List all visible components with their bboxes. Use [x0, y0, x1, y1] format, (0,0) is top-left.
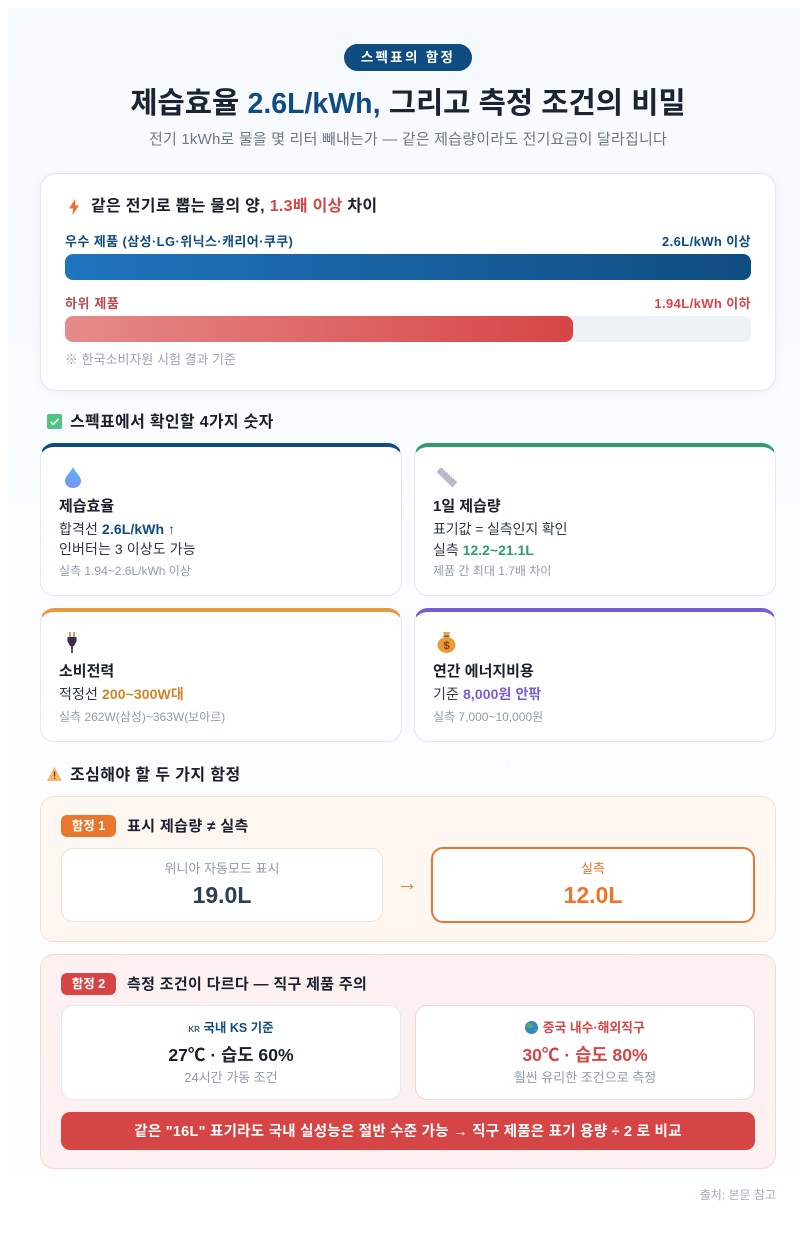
panel: trap 2 [40, 954, 776, 1169]
card note: 실측 7,000~10,000원 [433, 710, 543, 724]
header badge [344, 44, 472, 71]
trap 2 heading: 측정 조건이 다르다 — 직구 제품 주의 [127, 976, 367, 993]
card: daily capacity [414, 443, 776, 596]
icon: ruler [436, 468, 457, 488]
label: poor products: 하위 제품 [65, 296, 119, 311]
label text: 중국 내수·해외직구 [543, 1020, 645, 1035]
icon: check [47, 414, 62, 429]
section heading: two traps [47, 766, 241, 784]
callout banner: 같은 "16L" 표기라도 국내 실성능은 절반 수준 가능 → 직구 제품은 표기 용량 ÷ 2 로 비교 [134, 1124, 682, 1140]
heading text: 스펙표에서 확인할 4가지 숫자 [70, 414, 274, 431]
box: measured value [431, 847, 755, 923]
source note: 출처: 본문 참고 [700, 1188, 776, 1202]
card text: 합격선 2.6L/kWh ↑ [59, 521, 175, 537]
icon: plug [68, 632, 76, 653]
title: 제습효율 2.6L/kWh, 그리고 측정 조건의 비밀 [130, 87, 686, 120]
badge: trap 1: 함정 1 [72, 819, 105, 833]
card: power consumption [40, 608, 402, 742]
box label: 위니아 자동모드 표시 [165, 861, 279, 876]
callout banner [61, 1112, 755, 1150]
icon: money bag: $ [443, 640, 450, 652]
box label: 실측 [581, 861, 605, 876]
icon: warning [47, 767, 62, 781]
box note: 훨씬 유리한 조건으로 측정 [514, 1070, 656, 1085]
icon: water drop [65, 467, 81, 488]
bar: good products [65, 254, 751, 280]
box: China overseas standard [415, 1005, 755, 1100]
badge: trap 2 [61, 973, 116, 995]
section heading: four numbers [47, 413, 274, 431]
value: good products: 2.6L/kWh 이상 [662, 234, 751, 249]
badge: trap 1 [61, 815, 116, 837]
icon: lightning [69, 199, 79, 215]
box: Korean KS standard [61, 1005, 401, 1100]
card title: 소비전력 [59, 663, 114, 680]
bar: poor products [65, 316, 751, 342]
card text: 표기값 = 실측인지 확인 [433, 521, 567, 537]
box note: 24시간 가동 조건 [184, 1070, 278, 1085]
icon: money bag [438, 632, 456, 653]
heading text: 조심해야 할 두 가지 함정 [70, 767, 241, 784]
subtitle: 전기 1kWh로 물을 몇 리터 빼내는가 — 같은 제습량이라도 전기요금이 달라집니다 [149, 131, 667, 148]
card text: 적정선 200~300W대 [59, 686, 184, 702]
card title: 1일 제습량 [433, 498, 501, 515]
card: dehumidifying efficiency [40, 443, 402, 596]
panel: trap 1 [40, 796, 776, 942]
card: annual energy cost [414, 608, 776, 742]
bar fill [65, 316, 573, 342]
card note: 실측 262W(삼성)~363W(보아르) [59, 710, 225, 724]
box value: 27℃ · 습도 60% [168, 1045, 294, 1065]
badge: trap 2: 함정 2 [72, 977, 105, 991]
arrow: → [396, 872, 418, 895]
panel: efficiency comparison [40, 173, 776, 391]
panel heading: 같은 전기로 뽑는 물의 양, 1.3배 이상 차이 [91, 198, 377, 215]
trap 1 heading: 표시 제습량 ≠ 실측 [127, 818, 249, 835]
card note: 실측 1.94~2.6L/kWh 이상 [59, 564, 191, 578]
card title: 연간 에너지비용 [433, 663, 534, 680]
value: poor products: 1.94L/kWh 이하 [654, 296, 751, 311]
box label [525, 1020, 645, 1035]
card text: 실측 12.2~21.1L [433, 542, 534, 558]
label: good products: 우수 제품 (삼성·LG·위닉스·캐리어·쿠쿠) [65, 234, 293, 249]
box: labelled value [61, 848, 383, 922]
icon: globe [525, 1021, 538, 1034]
box value: 30℃ · 습도 80% [522, 1045, 648, 1065]
footnote: ※ 한국소비자원 시험 결과 기준 [65, 352, 236, 367]
box value: 12.0L [564, 882, 622, 908]
card title: 제습효율 [59, 498, 114, 515]
card note: 제품 간 최대 1.7배 차이 [433, 564, 551, 578]
box label: KR 국내 KS 기준 [188, 1021, 274, 1035]
card text: 기준 8,000원 안팎 [433, 686, 541, 702]
box value: 19.0L [193, 882, 251, 908]
header badge: 스펙표의 함정 [361, 50, 455, 65]
card text: 인버터는 3 이상도 가능 [59, 541, 196, 557]
